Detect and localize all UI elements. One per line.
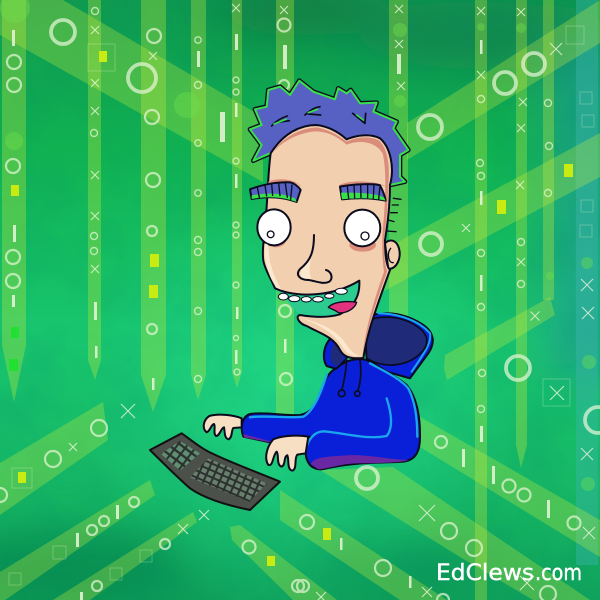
open mouth interior xyxy=(275,281,359,317)
watermark text: .com xyxy=(535,561,582,586)
brow shadows xyxy=(268,179,387,187)
stitch marks xyxy=(387,198,401,232)
character: body and hoodie xyxy=(204,313,433,471)
left hand xyxy=(204,415,242,439)
keyboard left key cluster xyxy=(161,441,200,471)
teeth xyxy=(278,288,347,302)
left eye xyxy=(257,209,291,247)
hood inner lining xyxy=(365,317,427,365)
hoodie cuff shadow xyxy=(311,455,408,469)
left eyebrow xyxy=(250,182,301,202)
keyboard right key cluster xyxy=(190,458,267,502)
character: head xyxy=(250,81,408,358)
face and neck xyxy=(263,125,392,358)
hood xyxy=(363,313,433,378)
hood left flap xyxy=(324,337,347,369)
ear xyxy=(385,241,400,269)
right hand xyxy=(266,436,308,471)
face shading xyxy=(273,127,389,356)
hoodie highlights xyxy=(250,375,327,417)
right eyebrow xyxy=(340,184,386,201)
chin highlight xyxy=(302,318,360,356)
nose xyxy=(298,235,332,283)
cheek highlight xyxy=(265,243,282,290)
hair strands xyxy=(272,107,366,126)
hoodie strings xyxy=(342,360,361,391)
watermark text: EdClews xyxy=(436,561,534,586)
keyboard xyxy=(150,433,280,510)
teal side bar xyxy=(576,0,598,565)
right eye xyxy=(344,210,380,252)
tongue xyxy=(328,302,357,313)
hoodie torso and arm xyxy=(242,359,420,469)
hair xyxy=(250,81,408,185)
